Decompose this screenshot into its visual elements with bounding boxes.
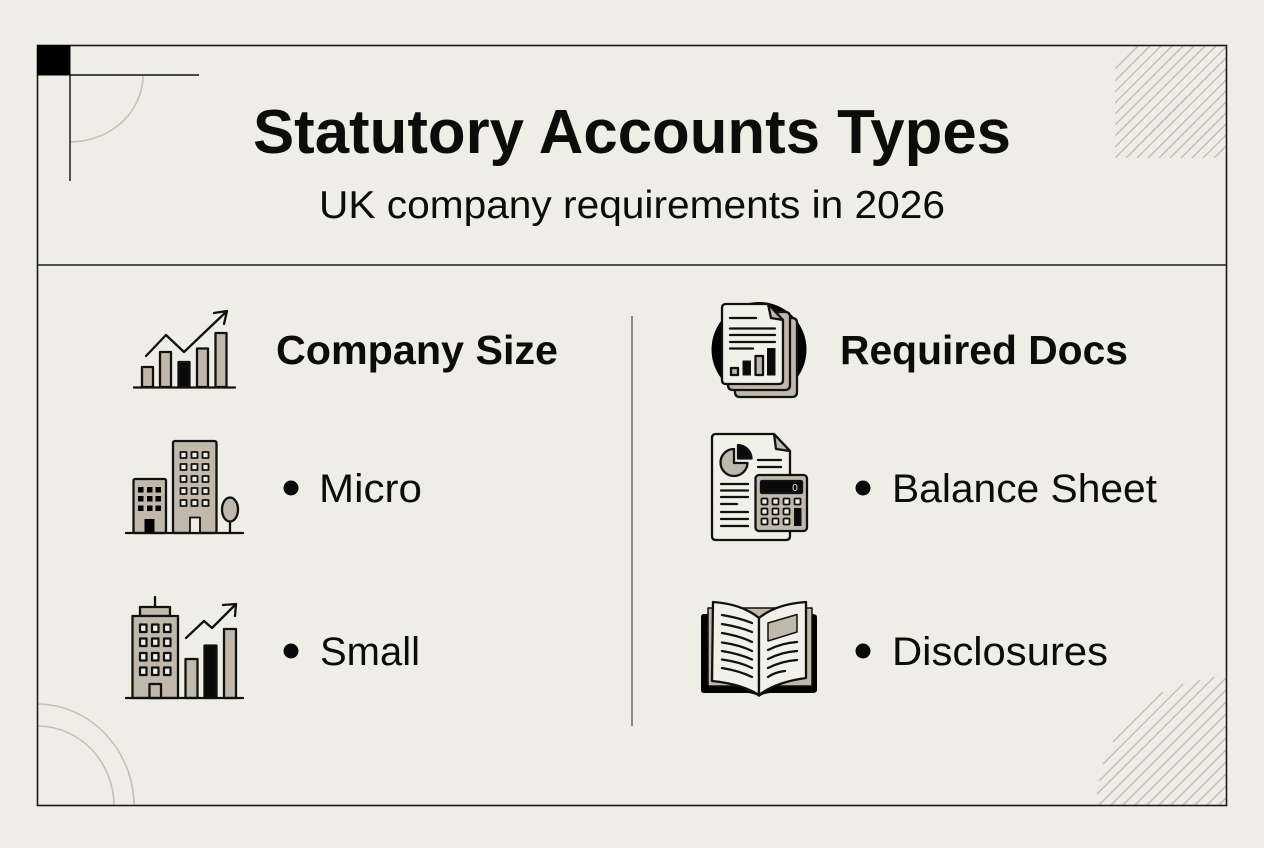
decoration: top-right hatch bbox=[1115, 46, 1226, 158]
label: balance sheet: Balance Sheet bbox=[892, 467, 1157, 511]
label: disclosures: Disclosures bbox=[892, 630, 1108, 674]
subtitle: UK company requirements in 2026 bbox=[319, 184, 945, 227]
title: Statutory Accounts Types bbox=[253, 98, 1011, 167]
decoration: top-left arc bbox=[70, 75, 143, 142]
icon: office with growth bars bbox=[126, 597, 243, 698]
panel: company size bbox=[126, 311, 558, 698]
icon: buildings and tree bbox=[126, 441, 243, 533]
heading: company size: Company Size bbox=[276, 327, 558, 373]
calculator display digit: 0 bbox=[792, 483, 798, 494]
label: small: Small bbox=[320, 630, 420, 674]
column divider bbox=[631, 316, 633, 726]
bullet: disclosures bbox=[856, 644, 870, 658]
bullet: balance sheet bbox=[856, 480, 870, 496]
corner mark bbox=[37, 45, 199, 181]
bullet: small bbox=[284, 644, 298, 658]
header divider bbox=[37, 264, 1227, 266]
heading: required docs: Required Docs bbox=[840, 327, 1128, 373]
panel: required docs bbox=[701, 302, 1157, 697]
icon: open book bbox=[701, 602, 817, 697]
icon: stacked documents bbox=[712, 302, 806, 397]
decoration: bottom-right hatch bbox=[1096, 676, 1226, 805]
icon: rising bar chart bbox=[134, 311, 235, 388]
decoration: bottom-left arcs bbox=[37, 704, 134, 806]
icon: report and calculator bbox=[712, 434, 807, 540]
label: micro: Micro bbox=[319, 467, 422, 511]
bullet: micro bbox=[284, 480, 298, 496]
